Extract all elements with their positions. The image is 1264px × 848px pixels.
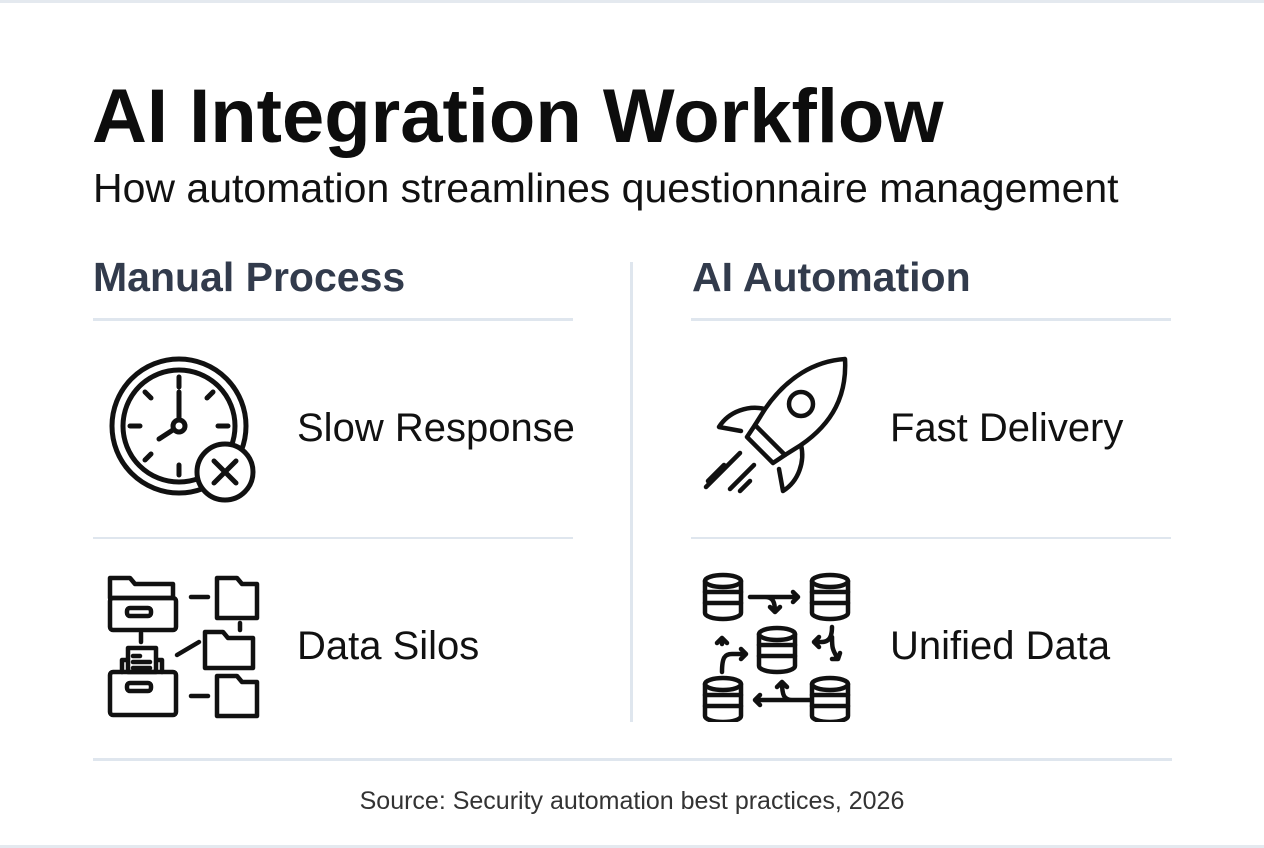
icon: rocket: [704, 356, 848, 494]
label: data silos: Data Silos: [297, 624, 479, 668]
label: fast delivery: Fast Delivery: [890, 406, 1123, 450]
heading: manual process: Manual Process: [93, 254, 405, 300]
icon: data silos: [108, 576, 260, 718]
heading: ai automation: AI Automation: [692, 254, 971, 300]
icon: clock with x: [110, 356, 256, 502]
icon: unified data: [702, 572, 850, 722]
label: unified data: Unified Data: [890, 624, 1110, 668]
panel: manual process: [93, 254, 575, 718]
label: slow response: Slow Response: [297, 406, 575, 450]
source note: Source: Security automation best practices, 2026: [360, 787, 904, 815]
panel: ai automation: [691, 254, 1171, 722]
title: AI Integration Workflow: [92, 74, 943, 159]
subtitle: How automation streamlines questionnaire management: [93, 165, 1119, 211]
